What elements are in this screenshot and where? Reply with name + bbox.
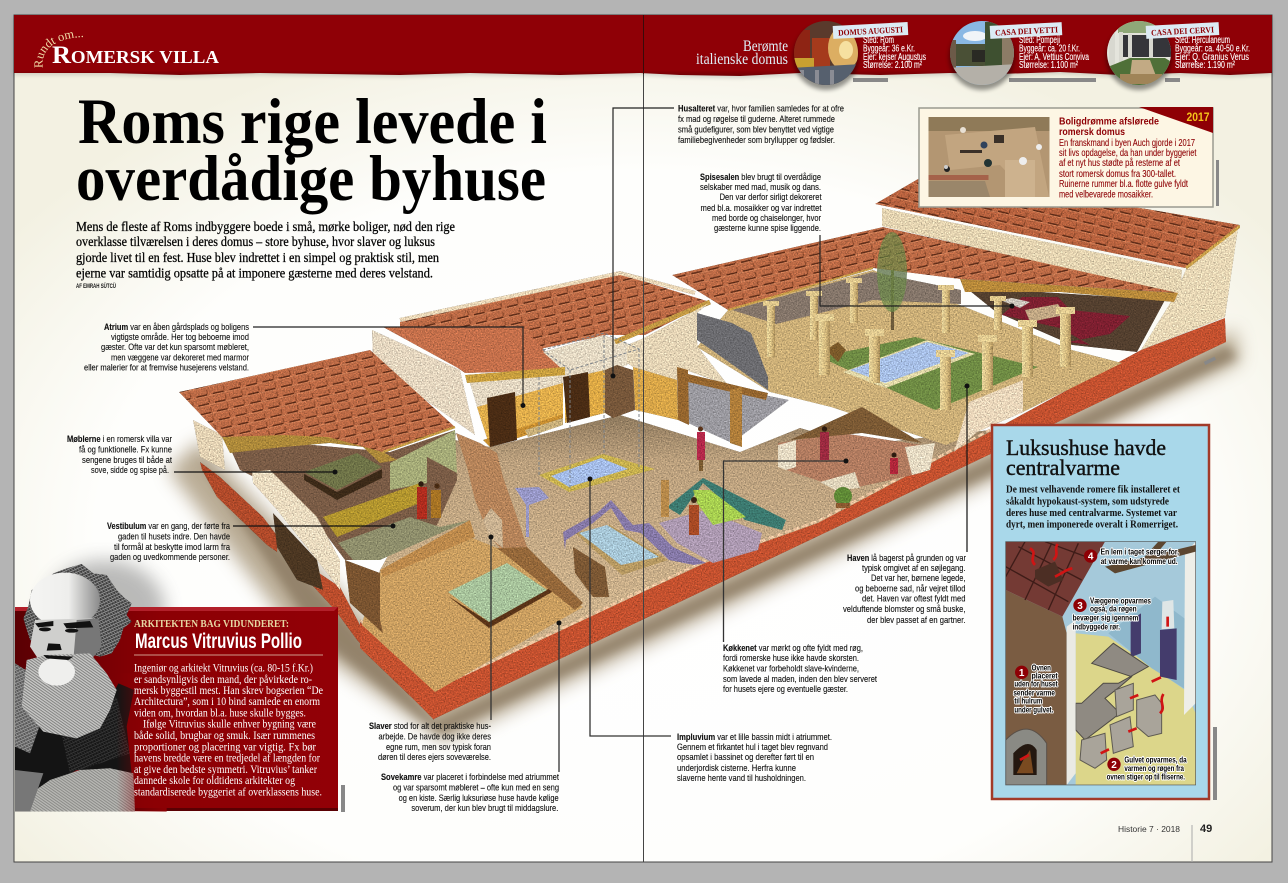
figure atrium	[697, 426, 705, 471]
tree	[877, 232, 907, 330]
panel: 2017 discovery: romersk domus	[1059, 126, 1125, 138]
panel heading: centralvarme	[1006, 455, 1120, 480]
callout: Køkkenet: Køkkenet var mørkt og ofte fyldt med røg,	[723, 643, 863, 653]
name: Marcus Vitruvius Pollio	[135, 630, 302, 653]
callout: Husalteret: små gudefigurer, som blev benyttet ved vigtige	[678, 124, 834, 134]
page footer	[1118, 823, 1212, 862]
step 4: at varme kan komme ud.	[1101, 557, 1178, 566]
biography text: er sandsynligvis den mand, der påvirkede ro-	[134, 673, 312, 686]
callout: Møblerne	[67, 434, 338, 475]
panel: Luksushuse havde centralvarme	[992, 425, 1217, 800]
panel heading: Luksushuse havde	[1006, 435, 1166, 460]
callout: Spisesalen: Spisesalen blev brugt til overdådige	[700, 172, 821, 182]
callout: Haven	[843, 384, 970, 625]
callout: Haven: velduftende blomster og små buske,	[843, 604, 966, 614]
left roof	[179, 350, 455, 452]
bench	[525, 418, 563, 437]
callout: Haven: det. Haven var oftest fyldt med	[862, 594, 966, 604]
step 1: uden for huset	[1014, 680, 1058, 689]
domus 2: Casa dei Vetti: CASA DEI VETTI	[995, 24, 1059, 38]
biography text: at give den bedste symmetri. Vitruvius’ tanker	[134, 764, 317, 776]
central roof	[400, 274, 710, 373]
step 3: også, da røgen	[1090, 605, 1137, 614]
header label: Berømte italienske domus: italienske domus	[696, 51, 788, 68]
step 4	[1084, 547, 1179, 566]
biography text: dannede skole for oldtidens arkitekter og	[134, 775, 295, 787]
step 1: Ovnen	[1032, 664, 1051, 673]
hypocaust diagram	[1006, 542, 1196, 785]
left wall	[1006, 590, 1067, 785]
callout: Møblerne: få og funktionelle. Fx kunne	[79, 444, 172, 454]
callout: Atrium: men væggene var dekoreret med marmor	[111, 352, 249, 362]
panel heading	[1006, 435, 1166, 480]
callout: Slaver	[369, 534, 494, 762]
domus 1: Domus Augusti: Ejer: kejser Augustus	[863, 52, 926, 63]
kicker: ARKITEKTEN BAG VIDUNDERET:	[134, 619, 289, 630]
atrium walls	[470, 368, 563, 447]
step 2	[1107, 756, 1187, 781]
courtyard floor	[697, 270, 1122, 445]
callout: Haven: der blev passet af en gartner.	[867, 615, 966, 625]
panel intro: dyrt, men imponerede overalt i Romerriget.	[1006, 520, 1178, 530]
callout: Impluvium: opsamlet i bassinet og derefter ført til en	[677, 752, 814, 762]
left wing room	[225, 430, 457, 560]
panel intro: De mest velhavende romere fik installeret et	[1006, 484, 1180, 496]
step 4: En lem i taget sørger for,	[1101, 547, 1179, 556]
domus 1: Domus Augusti: DOMUS AUGUSTI	[838, 24, 904, 38]
section tag: Rundt om	[34, 32, 219, 69]
step 2: 2	[1111, 760, 1117, 771]
callout: Husalteret: fx mad og røgelse til guderne. Alteret rummede	[678, 114, 835, 124]
domus 2: Casa dei Vetti: Størrelse: 1.100 m²	[1019, 60, 1078, 71]
year tag: 2017	[1186, 110, 1210, 124]
title: overdådige byhuse	[76, 143, 546, 215]
biography text: havens bredde være en tredjedel af længden for	[134, 752, 320, 764]
callout: Slaver: Slaver stod for alt det praktiske hus-	[369, 721, 491, 731]
callout: Impluvium: underjordisk cisterne. Herfra kunne	[677, 763, 796, 773]
callout: Atrium	[84, 322, 526, 408]
left cross-section	[222, 433, 397, 463]
callout: Vestibulum: til formål at beskytte imod larm fra	[114, 542, 230, 552]
callout: Køkkenet: for husets ejere og eventuelle gæster.	[723, 684, 848, 694]
callout: Husalteret	[610, 104, 844, 378]
step 3	[1073, 597, 1151, 631]
cross sections	[465, 367, 565, 383]
header label: Berømte italienske domus	[696, 38, 788, 68]
page footer: 49	[1200, 823, 1212, 835]
step 1: sender varme	[1013, 688, 1055, 697]
back columns	[767, 303, 775, 357]
biography text	[134, 662, 323, 798]
callout: Haven: og beboerne sad, når vejret tillod	[855, 584, 966, 594]
intro text	[76, 219, 455, 280]
front red foundation	[360, 318, 1226, 719]
domus 3: Casa dei Cervi: CASA DEI CERVI	[1151, 24, 1215, 38]
green bedroom	[667, 478, 786, 530]
step 1: placeret	[1032, 672, 1058, 681]
biography text: både solid, brugbar og smuk. Især rummenes	[134, 729, 315, 742]
domus 2: Casa dei Vetti	[946, 20, 1096, 90]
middle room	[575, 525, 668, 575]
upper right roof	[875, 172, 1240, 268]
heat arrows	[1020, 544, 1168, 760]
floor slabs upper	[1076, 643, 1148, 740]
callout: Sovekamre: og en kiste. Særlig luksuriøse huse havde kølige	[399, 793, 559, 803]
callout: Slaver: egne rum, men sov typisk foran	[386, 742, 491, 752]
callout: Husalteret: Husalteret var, hvor familien samledes for at ofre	[678, 104, 844, 114]
arch wall	[456, 433, 527, 548]
section tag: Rundt om: ROMERSK VILLA	[52, 42, 219, 69]
callout: Slaver: arbejde. De havde dog ikke deres	[378, 732, 491, 742]
peristyle roof	[672, 227, 1178, 310]
villa floor plate	[360, 415, 990, 695]
biography text: mersk byggestil mest. Han skrev bogserien “De	[134, 685, 323, 697]
callout: Sovekamre: Sovekamre var placeret i forbindelse med atriummet	[381, 772, 559, 782]
callout: Spisesalen: med bl.a. mosaikker og var indrettet	[700, 203, 822, 213]
biography text: Ingeniør og arkitekt Vitruvius (ca. 80-15 f.Kr.)	[134, 662, 313, 674]
domus 1: Domus Augusti	[790, 20, 926, 90]
panel: 2017 discovery: Ruinerne rummer bl.a. flotte gulve fyldt	[1059, 179, 1188, 190]
panel intro: såkaldt hypokaust-system, som udstyrede	[1006, 496, 1169, 508]
domus 2: Casa dei Vetti: Ejer: A. Vettius Conviva	[1019, 52, 1089, 63]
doors	[487, 392, 517, 447]
intro text: overklasse tilværelsen i deres domus – store byhuse, hvor slaver og luksus	[76, 234, 435, 249]
domus 1: Domus Augusti: Byggeår: 36 e.Kr.	[863, 42, 915, 54]
panel: 2017 discovery	[919, 107, 1219, 207]
callout: Atrium: vigtigste område. Her tog beboerne imod	[111, 332, 249, 342]
step 2: varmen og røgen fra	[1124, 764, 1184, 773]
portrait engraving	[15, 564, 167, 812]
lower bedroom	[362, 535, 583, 692]
biography text: Ifølge Vitruvius skulle enhver bygning være	[143, 718, 316, 730]
panel: 2017 discovery: af et nyt hus stødte på resterne af et	[1059, 157, 1180, 169]
callout: Sovekamre: soverum, der kun blev brugt til middagslure.	[411, 803, 558, 813]
tile roof	[1006, 542, 1105, 617]
callout: Køkkenet: som lavede al maden, inden den blev serveret	[723, 674, 877, 684]
callout: Atrium: Atrium var en åben gårdsplads og boligens	[104, 322, 249, 332]
house altar	[605, 365, 635, 418]
section tag: Rundt om: Rundt om...	[34, 32, 83, 68]
front columns	[1060, 311, 1071, 367]
callout: Atrium: gæster. Ofte var det kun sparsomt møbleret,	[101, 342, 249, 352]
biography text: proportioner og placering var vigtig. Fx bør	[134, 742, 316, 754]
step 2: Gulvet opvarmes, da	[1124, 756, 1187, 765]
callout: Haven: typisk omgivet af en søjlegang.	[862, 563, 966, 573]
impluvium	[539, 454, 655, 492]
step 1	[1013, 664, 1058, 714]
biography text: Architectura”, som i 10 bind samlede en enorm	[134, 696, 320, 708]
header label: Berømte italienske domus: Berømte	[743, 38, 788, 55]
callout: Spisesalen: gæsterne kunne spise liggende.	[714, 223, 821, 233]
intro text: ejerne var samtidig opsatte på at imponere gæsterne med deres velstand.	[76, 266, 433, 280]
callout: Sovekamre	[381, 620, 562, 813]
panel: Marcus Vitruvius Pollio	[15, 560, 345, 812]
year tag	[1139, 107, 1213, 133]
gray room	[697, 313, 768, 390]
callout: Impluvium: slaverne hente vand til husholdningen.	[677, 773, 806, 783]
domus 3: Casa dei Cervi: Størrelse: 1.190 m²	[1175, 60, 1235, 71]
domus 2: Casa dei Vetti: Byggeår: ca. 20 f.Kr.	[1019, 42, 1080, 54]
red banner	[14, 15, 1272, 78]
callout: Vestibulum: Vestibulum var en gang, der førte fra	[107, 521, 230, 531]
callout: Sovekamre: og var sparsomt møbleret – ofte kun med en seng	[393, 782, 559, 792]
callout: Køkkenet: fordi romerske huse ikke havde skorsten.	[723, 653, 859, 663]
rear wall	[882, 208, 1182, 295]
page footer: Historie 7 · 2018	[1118, 825, 1181, 834]
callout: Køkkenet	[723, 458, 877, 694]
callout: Vestibulum	[107, 521, 396, 562]
domus 2: Casa dei Vetti: Sted: Pompeji	[1019, 35, 1060, 46]
step 3: indbyggede rør.	[1073, 622, 1120, 631]
callout: Slaver: døren til deres ejers soveværelse.	[378, 752, 491, 762]
garden front wall	[954, 380, 1023, 452]
title: Roms rige levede i	[78, 86, 547, 158]
biography text: viden om, hvordan bl.a. huse skulle bygges.	[134, 708, 306, 720]
panel intro: deres huse med centralvarme. Systemet var	[1006, 508, 1177, 519]
callout: Spisesalen: Den var derfor sirligt dekoreret	[720, 192, 822, 202]
step 1: til hulrum	[1014, 697, 1042, 706]
panel: 2017 discovery: Boligdrømme afslørede	[1059, 116, 1159, 128]
callout: Møblerne: sengene bruges til både at	[82, 455, 172, 465]
step 2: ovnen stiger op til fliserne.	[1107, 772, 1185, 781]
pillars	[1080, 683, 1162, 768]
callout: Vestibulum: gaden og uvedkommende personer.	[110, 552, 230, 562]
step 1: under gulvet.	[1014, 705, 1053, 714]
domus 3: Casa dei Cervi: Byggeår: ca. 40-50 e.Kr.	[1175, 42, 1250, 54]
callout: Spisesalen	[700, 172, 1014, 308]
callout: Husalteret: familiebegivenheder som bryllupper og fødsler.	[678, 135, 835, 145]
callout: Møblerne: Møblerne i en romersk villa var	[67, 434, 172, 444]
panel: 2017 discovery: med velbevarede mosaikker.	[1059, 190, 1153, 200]
callout: Spisesalen: selskaber med mad, musik og dans.	[700, 182, 821, 192]
panel: 2017 discovery: stort romersk domus fra 300-tallet.	[1059, 169, 1176, 180]
callout: Haven: Haven lå bagerst på grunden og var	[847, 553, 966, 563]
dining room	[965, 287, 1165, 352]
step 3: 3	[1077, 601, 1083, 612]
garden	[820, 337, 1038, 410]
step 4: 4	[1088, 552, 1094, 563]
byline: AF EMRAH SÜTCÜ	[76, 283, 116, 290]
domus 1: Domus Augusti: Sted: Rom	[863, 35, 894, 46]
fold line	[642, 15, 644, 862]
callout: Haven: Det var her, børnene legede,	[871, 573, 966, 583]
callout: Møblerne: sove, sidde og spise på.	[91, 465, 169, 475]
villa illustration	[168, 172, 1240, 742]
domus 1: Domus Augusti: Størrelse: 2.100 m²	[863, 60, 922, 71]
domus 3: Casa dei Cervi: Sted: Herculaneum	[1175, 35, 1230, 46]
oven	[1006, 729, 1047, 785]
roof opening guides	[539, 333, 639, 490]
callout: Køkkenet: Køkkenet var forbeholdt slave-kvinderne,	[723, 664, 859, 674]
callout: Impluvium: Impluvium var et lille bassin midt i atriummet.	[677, 732, 832, 742]
step 3: Væggene opvarmes	[1090, 597, 1151, 606]
panel: 2017 discovery: sit livs opdagelse, da han under byggeriet	[1059, 148, 1197, 159]
callout: Impluvium	[588, 476, 832, 783]
callout: Atrium: eller malerier for at fremvise husejerens velstand.	[84, 362, 249, 372]
step 1: 1	[1019, 668, 1025, 679]
excavation photo	[928, 117, 1050, 197]
callout: Vestibulum: gaden til husets indre. Den havde	[118, 532, 230, 542]
biography text: standardiserede byggeriet af overklassens huse.	[134, 786, 322, 798]
domus 3: Casa dei Cervi: Ejer: Q. Granius Verus	[1175, 52, 1249, 63]
step 3: bevæger sig igennem	[1073, 614, 1138, 623]
panel: 2017 discovery: En franskmand i byen Auch gjorde i 2017	[1059, 138, 1195, 149]
intro text: Mens de fleste af Roms indbyggere boede i små, mørke boliger, nød den rige	[76, 219, 455, 234]
left wing red foundation	[200, 462, 278, 552]
panel intro	[1006, 484, 1180, 530]
domus 3: Casa dei Cervi	[1103, 20, 1250, 90]
title	[76, 86, 547, 215]
callout: Impluvium: Gennem et firkantet hul i taget blev regnvand	[677, 742, 828, 752]
callout: Spisesalen: med borde og chaiselonger, hvor	[712, 213, 821, 223]
kitchen	[778, 433, 935, 487]
intro text: gjorde livet til en fest. Huse blev indrettet i en simpel og praktisk stil, men	[76, 250, 439, 265]
